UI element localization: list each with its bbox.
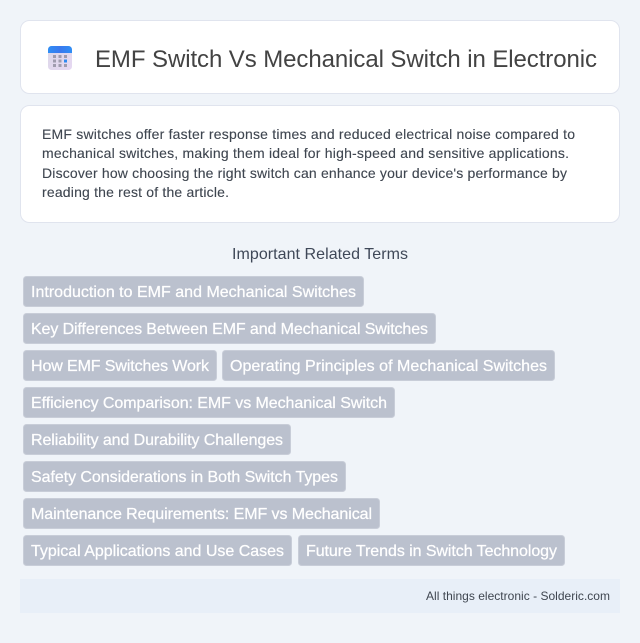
tag list bbox=[24, 276, 564, 566]
footer: All things electronic - Solderic.com bbox=[426, 589, 610, 603]
tag: reliability bbox=[24, 424, 290, 454]
tag: how EMF switches work: How EMF Switches Work bbox=[31, 358, 210, 375]
panel: intro paragraph bbox=[20, 106, 620, 222]
text block: intro: mechanical switches, making them ideal for high-speed and sensitive applications. bbox=[42, 145, 569, 161]
tag: applications: Typical Applications and Use Cases bbox=[31, 543, 284, 560]
tag: efficiency comparison bbox=[24, 388, 394, 418]
text block: intro: Discover how choosing the right switch can enhance your device's performance by bbox=[42, 165, 567, 181]
tag: operating principles bbox=[222, 350, 554, 380]
tag: key differences: Key Differences Between EMF and Mechanical Switches bbox=[31, 321, 428, 338]
tag: key differences bbox=[24, 314, 436, 344]
text block: intro bbox=[42, 126, 575, 200]
icon: calendar bbox=[48, 46, 72, 70]
tag: future trends bbox=[298, 536, 564, 566]
tag: maintenance: Maintenance Requirements: EMF vs Mechanical bbox=[31, 506, 372, 523]
text block: intro: EMF switches offer faster response times and reduced electrical noise compared to bbox=[42, 126, 575, 142]
panel: title card bbox=[20, 20, 620, 94]
footer bbox=[20, 579, 620, 613]
tag: introduction bbox=[24, 276, 364, 306]
tag: safety: Safety Considerations in Both Switch Types bbox=[31, 469, 338, 486]
tag: future trends: Future Trends in Switch Technology bbox=[306, 543, 557, 560]
tag: how EMF switches work bbox=[24, 350, 216, 380]
heading: related terms: Important Related Terms bbox=[232, 246, 408, 263]
tag: reliability: Reliability and Durability Challenges bbox=[31, 432, 283, 449]
text block: intro: reading the rest of the article. bbox=[42, 184, 229, 200]
tag: introduction: Introduction to EMF and Mechanical Switches bbox=[31, 284, 356, 301]
tag: operating principles: Operating Principles of Mechanical Switches bbox=[230, 358, 547, 375]
tag: applications bbox=[24, 536, 292, 566]
tag: maintenance bbox=[24, 498, 380, 528]
tag: efficiency comparison: Efficiency Comparison: EMF vs Mechanical Switch bbox=[31, 395, 387, 412]
tag: safety bbox=[24, 462, 346, 492]
title: EMF Switch Vs Mechanical Switch in Electronic bbox=[95, 46, 597, 73]
